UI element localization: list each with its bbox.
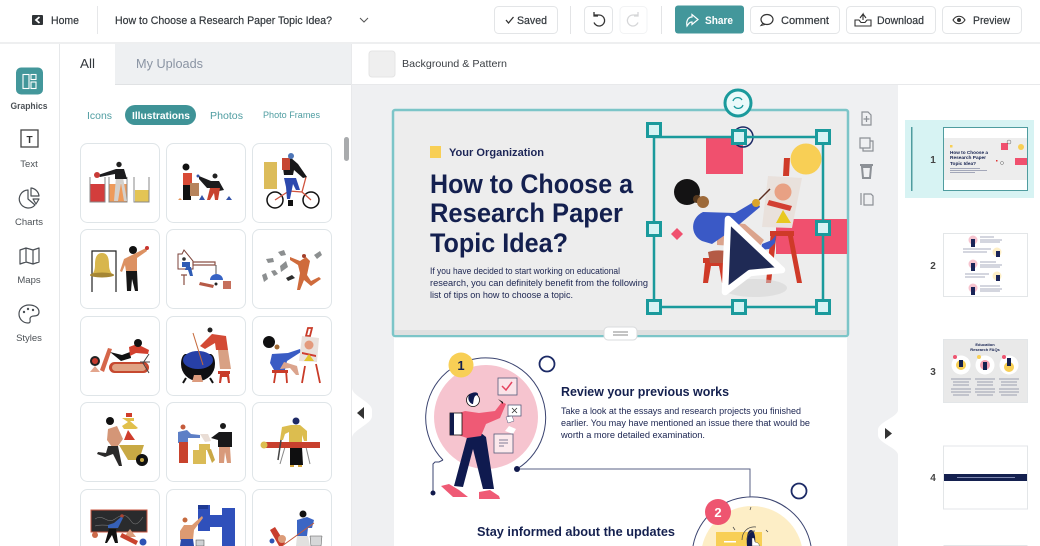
- thumbnail 2: 2: [930, 261, 936, 272]
- home label: Home: [51, 15, 79, 27]
- main title: Research Paper: [430, 198, 623, 228]
- filter: icons: Icons: [87, 110, 112, 122]
- thumbnail 2: [930, 234, 1028, 296]
- button: download: [846, 6, 936, 34]
- icon: styles palette: [19, 305, 39, 323]
- icon: cursor: [723, 219, 787, 297]
- shape: yellow circle: [790, 144, 822, 174]
- number badge 1: 1: [457, 358, 465, 373]
- thumbnail 1 selected: [905, 120, 1034, 198]
- canvas workspace: [352, 85, 898, 546]
- thumbnail 4: [930, 446, 1028, 509]
- slide page body: [394, 337, 847, 546]
- top toolbar: [0, 0, 1040, 44]
- illustration card 13: blackboard: [80, 490, 160, 546]
- main title: How to Choose a: [430, 169, 634, 199]
- navy ring decoration: [540, 356, 554, 372]
- thumbnail 1 selected: How to Choose a: [950, 150, 988, 156]
- left collapse tab: [352, 388, 372, 438]
- illustration card 6: chasing papers: [252, 230, 332, 308]
- document title: How to Choose a Research Paper Topic Idea?: [115, 15, 332, 27]
- resize handles: [648, 124, 830, 314]
- connector wire: [433, 460, 443, 493]
- illustration: painter at easel: [674, 158, 802, 283]
- background and pattern bar: [352, 44, 1040, 85]
- button: preview: [942, 6, 1022, 34]
- thumbnail 1 selected: 1: [930, 155, 936, 166]
- tab: my uploads: My Uploads: [136, 57, 203, 71]
- intro paragraph: research, you can definitely benefit from the following: [430, 278, 648, 288]
- label: maps: Maps: [17, 275, 41, 286]
- illustration card 2: collecting shapes: [166, 144, 246, 222]
- thumbnail 1 selected: Topic Idea?: [950, 161, 976, 167]
- page resize pill: [604, 327, 637, 340]
- page action icons: [860, 112, 873, 205]
- label: charts: Charts: [15, 217, 43, 228]
- button: comment: [750, 6, 840, 34]
- panel: asset library: [60, 44, 352, 546]
- illustration card 15: stirring bucket: [252, 490, 332, 546]
- button: share: [675, 6, 744, 34]
- button: preview: Preview: [973, 15, 1010, 27]
- illustration card 8: cauldron stirrer: [166, 316, 246, 396]
- button: undo: [584, 6, 612, 34]
- main title: Topic Idea?: [430, 228, 568, 258]
- number badge 2: [705, 499, 731, 525]
- illustration card 10: wheelbarrow: [80, 402, 160, 482]
- illustration card 12: sawing log: [252, 402, 332, 482]
- intro paragraph: If you have decided to start working on educational: [430, 266, 620, 276]
- illustration card 14: painting a letter: [166, 490, 246, 546]
- shape: pink diamond: [671, 228, 683, 240]
- number badge 1: [448, 352, 474, 378]
- thumbnail 3: Research FAQs: [970, 347, 1001, 352]
- intro paragraph: list of tips on how to choose a topic.: [430, 290, 573, 300]
- background label: Background & Pattern: [402, 58, 507, 70]
- thumbnail 3: [930, 340, 1028, 402]
- step text: Take a look at the essays and research projects you finished: [561, 406, 801, 416]
- icon: graphics: [16, 68, 43, 94]
- illustration: hand on folder: [716, 507, 768, 546]
- tab: all: All: [80, 57, 95, 71]
- left icon sidebar: [10, 44, 60, 546]
- illustration card 11: handing over papers: [166, 402, 246, 482]
- icon: title dropdown chevron: [360, 18, 368, 22]
- shape: pink rectangle: [776, 219, 847, 254]
- icon: add page: [862, 112, 871, 125]
- label: graphics: Graphics: [10, 101, 48, 112]
- step heading: Review your previous works: [561, 385, 729, 399]
- illustration card 1: sorting fruit: [80, 144, 160, 222]
- icon: home back: [32, 15, 43, 25]
- icon: duplicate: [860, 138, 873, 151]
- button: comment: Comment: [781, 15, 829, 27]
- step text: [560, 406, 810, 440]
- illustration card 7: reclining figure: [80, 316, 160, 396]
- icon: text: [21, 130, 38, 147]
- thumbnail 4: 4: [930, 473, 936, 484]
- right collapse tab: [878, 410, 898, 455]
- step text: earlier. You may have mentioned an issue there that would be: [561, 418, 810, 428]
- button: share: Share: [705, 15, 733, 27]
- organization name: Your Organization: [449, 147, 544, 159]
- button: saved: [494, 6, 558, 34]
- button: redo: [620, 6, 647, 34]
- step one: [426, 352, 810, 499]
- pink backdrop circle: [434, 365, 538, 469]
- pale backdrop circle: [702, 506, 802, 546]
- button: download: Download: [877, 15, 924, 27]
- icon: text: T: [26, 135, 33, 146]
- icon: copy page: [861, 193, 873, 205]
- shape: navy ring: [733, 127, 753, 147]
- wire end dot: [430, 490, 436, 496]
- label: styles: Styles: [16, 333, 42, 344]
- illustration card 3: cyclist with parcels: [252, 144, 332, 222]
- icon: maps: [20, 248, 39, 264]
- illustration card 5: crane operator: [166, 230, 246, 308]
- shape: pink square: [706, 138, 743, 174]
- thumbnail 3: 3: [930, 367, 936, 378]
- filter: photos: Photos: [210, 110, 243, 122]
- icon: charts: [19, 188, 39, 208]
- step heading: Stay informed about the updates: [477, 525, 675, 539]
- step two: [477, 484, 811, 546]
- navy ring decoration: [792, 484, 806, 498]
- outer ring: [426, 358, 546, 469]
- label: text: Text: [20, 159, 38, 170]
- slide header panel: [393, 90, 848, 340]
- thumbnail 5 edge: [944, 545, 1028, 546]
- illustration card 9: painter at easel: [252, 316, 332, 396]
- main title: [430, 169, 634, 258]
- connector between steps: [514, 466, 750, 497]
- icon: delete: [860, 165, 873, 178]
- page thumbnails panel: [898, 85, 1040, 546]
- filter: illustrations: Illustrations: [132, 110, 190, 122]
- thumbnail 3: Education: [975, 342, 995, 347]
- illustration: student with notes: [441, 378, 521, 499]
- thumbnail 1 selected: Research Paper: [950, 155, 986, 161]
- rotate handle: [725, 90, 751, 116]
- organization logo: [430, 146, 441, 158]
- scrollbar: [344, 137, 349, 161]
- illustration card 4: bell ringer: [80, 230, 160, 308]
- filter: photo frames: Photo Frames: [263, 110, 320, 120]
- number badge 2: 2: [714, 505, 722, 520]
- button: saved: Saved: [517, 15, 547, 27]
- selection frame: [648, 90, 830, 314]
- step text: worth a more detailed examination.: [560, 430, 705, 440]
- filter: illustrations: [125, 105, 196, 125]
- tab: my uploads: [115, 44, 351, 85]
- intro paragraph: [430, 266, 648, 300]
- background swatch: [369, 51, 395, 77]
- outer ring: [693, 497, 811, 546]
